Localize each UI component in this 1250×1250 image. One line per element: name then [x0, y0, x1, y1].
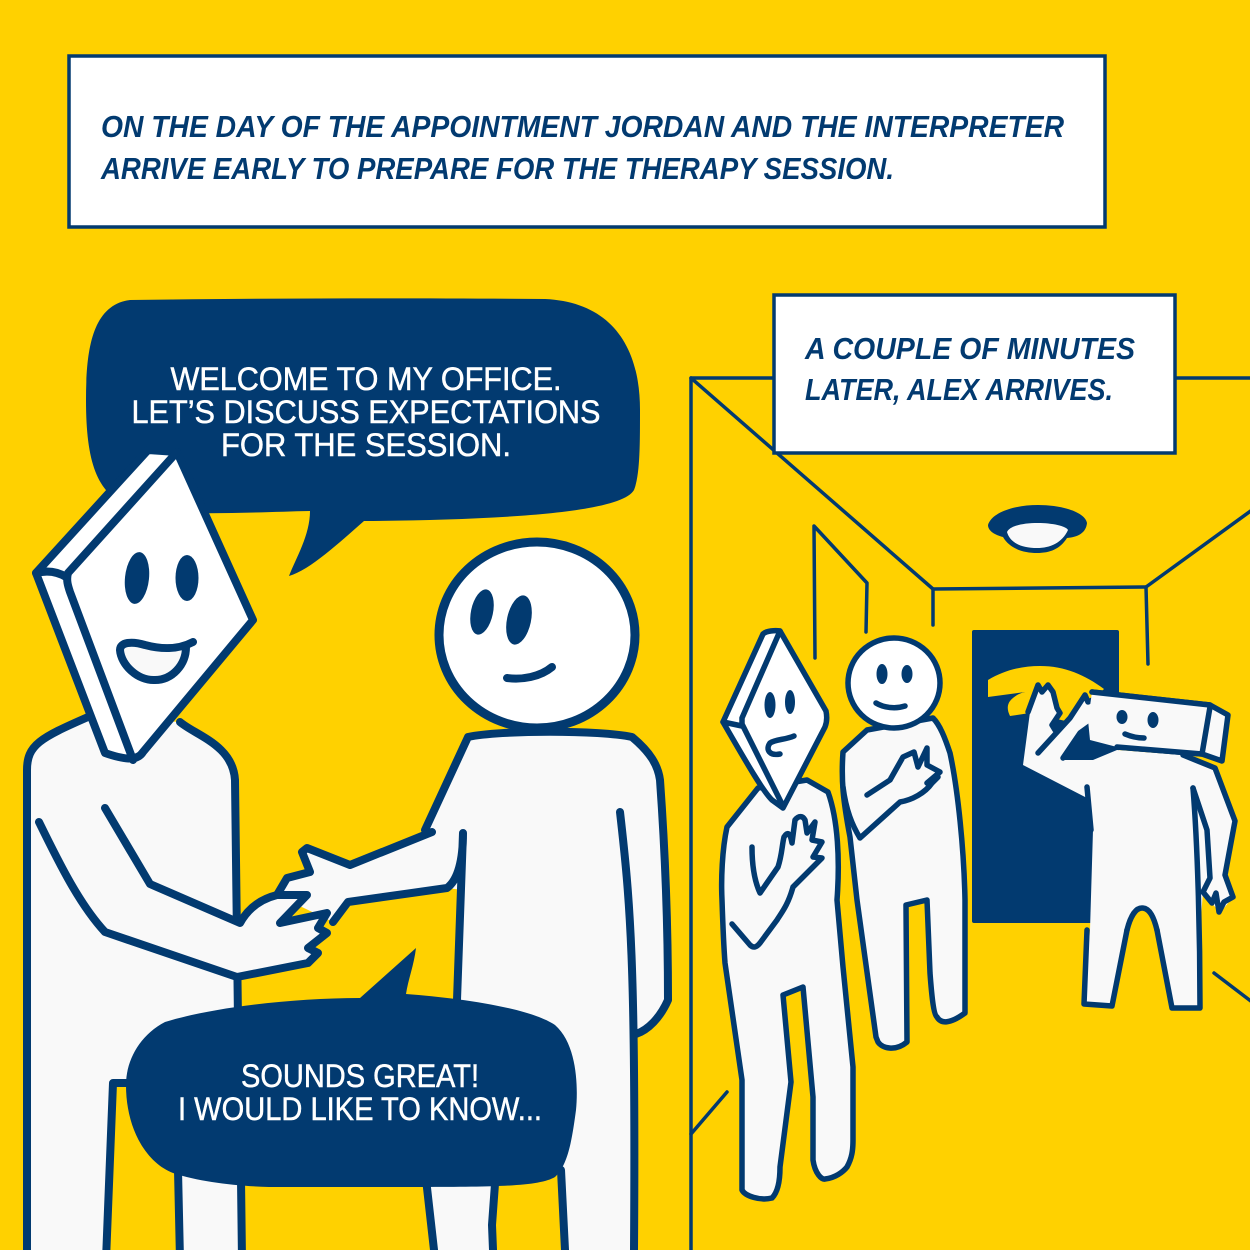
panel: room corridor lines	[691, 378, 1250, 1250]
speech bubble: welcome: WELCOME TO MY OFFICE.	[170, 361, 562, 397]
character: interpreter round head	[439, 542, 635, 728]
jordan eyes	[122, 551, 152, 605]
interpreter legs below bubble	[425, 1170, 565, 1250]
character: small jordan (diamond head)	[722, 631, 853, 1199]
character: small interpreter (round head)	[842, 638, 965, 1048]
small jordan arm and hand	[732, 817, 822, 947]
speech bubble: welcome: FOR THE SESSION.	[221, 427, 511, 463]
caption: alex arrives: A COUPLE OF MINUTES	[804, 332, 1136, 366]
jordan mouth	[120, 642, 193, 680]
character: interpreter body (right)	[277, 732, 668, 1250]
door	[972, 630, 1119, 923]
character: alex (rectangular head)	[1023, 685, 1235, 1008]
character: jordan body (left)	[27, 717, 327, 1250]
speech bubble: sounds great: SOUNDS GREAT!	[241, 1058, 479, 1094]
speech bubble: sounds great	[126, 948, 577, 1187]
speech bubble: welcome: LET’S DISCUSS EXPECTATIONS	[132, 394, 600, 430]
icon: ceiling lamp	[988, 505, 1087, 553]
caption: top	[69, 56, 1105, 227]
caption: alex arrives	[774, 295, 1175, 453]
character: jordan diamond head	[36, 450, 253, 760]
caption: top: ARRIVE EARLY TO PREPARE FOR THE THERAPY SESSION.	[100, 152, 894, 186]
speech bubble: welcome	[86, 298, 640, 576]
speech bubble: sounds great: I WOULD LIKE TO KNOW...	[178, 1091, 542, 1127]
caption: alex arrives: LATER, ALEX ARRIVES.	[805, 373, 1113, 407]
jordan arm and hand	[39, 808, 327, 977]
alex hands	[1028, 685, 1103, 758]
caption: top: ON THE DAY OF THE APPOINTMENT JORDAN AND THE INTERPRETER	[101, 110, 1064, 144]
